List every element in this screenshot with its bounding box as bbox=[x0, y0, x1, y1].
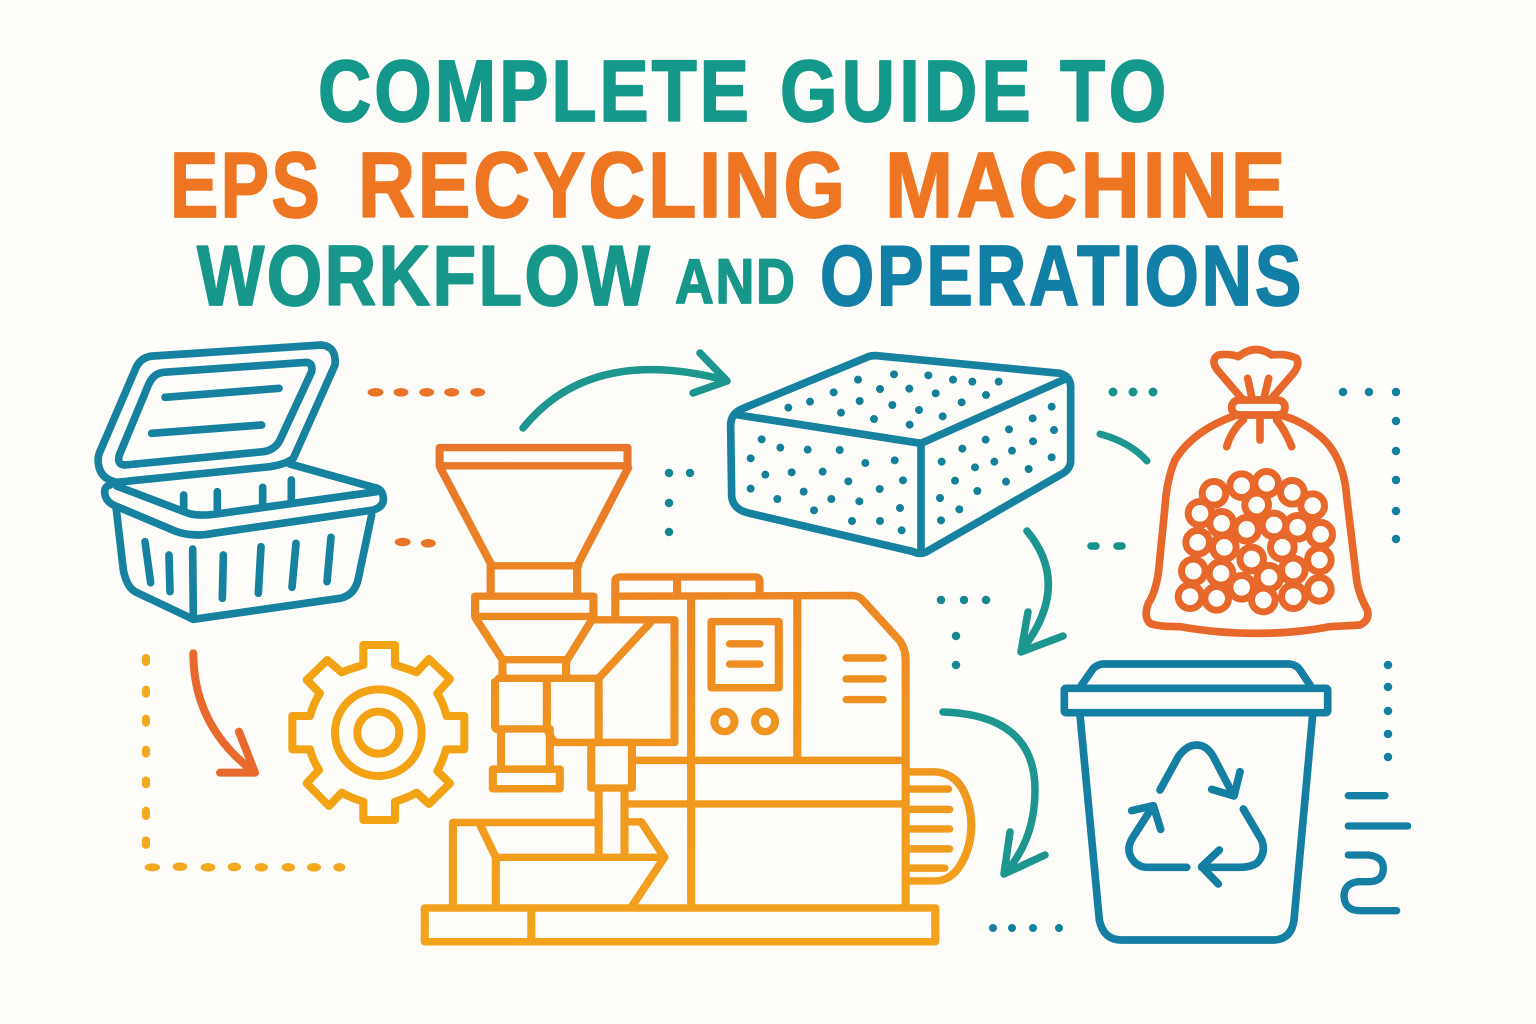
output tray bbox=[453, 822, 664, 907]
teal dots near bag bbox=[1113, 388, 1153, 396]
control knobs bbox=[714, 711, 775, 732]
dashed connector: orange lower bbox=[395, 538, 436, 548]
control cabinet bbox=[615, 577, 906, 908]
blue dots right of bin bbox=[1384, 665, 1392, 757]
title line 1: TO bbox=[1060, 43, 1166, 140]
icon: foam block bbox=[731, 356, 1071, 553]
title line 3 bbox=[197, 228, 1301, 324]
dashed connector: amber left bbox=[142, 654, 345, 872]
motor bbox=[908, 772, 971, 881]
title line 1: COMPLETE bbox=[318, 43, 749, 140]
title line 2: MACHINE bbox=[885, 133, 1285, 237]
teal arrow: foam block to bin bbox=[1021, 531, 1063, 652]
teal dots near hopper bbox=[669, 473, 690, 532]
teal arrow: machine to bin bbox=[943, 712, 1045, 874]
title line 3: WORKFLOW bbox=[197, 228, 650, 323]
title line 1: GUIDE bbox=[780, 43, 1031, 140]
teal dots right of machine bbox=[941, 600, 986, 665]
hopper bbox=[440, 448, 628, 596]
dashed connector: orange top bbox=[368, 388, 485, 397]
recycle symbol bbox=[1129, 745, 1263, 884]
teal dashes near bag bbox=[1091, 542, 1122, 550]
title bbox=[170, 43, 1301, 324]
title line 2: EPS bbox=[170, 133, 320, 237]
title line 2 bbox=[170, 133, 1285, 237]
teal arc connector bbox=[1100, 434, 1147, 461]
control screen bbox=[711, 622, 779, 688]
blue dots below machine bbox=[993, 924, 1059, 932]
extruder block bbox=[493, 620, 674, 856]
icon: recycling machine bbox=[425, 448, 971, 942]
decorative lines and squiggle bbox=[1344, 796, 1408, 911]
title line 1 bbox=[318, 43, 1166, 140]
title line 2: RECYCLING bbox=[358, 134, 845, 237]
icon: bag of pellets bbox=[1146, 350, 1368, 633]
blue dotted connector right of bag bbox=[1343, 392, 1396, 539]
icon: recycling bin bbox=[1064, 664, 1328, 940]
title line 3: OPERATIONS bbox=[820, 230, 1301, 324]
pellets bbox=[1190, 483, 1321, 600]
base plate bbox=[425, 908, 935, 942]
title line 3: AND bbox=[675, 247, 795, 317]
feed throat bbox=[475, 596, 593, 678]
foam dots bbox=[751, 374, 1054, 530]
orange arrow: container to gear bbox=[193, 653, 255, 773]
icon: gear bbox=[292, 645, 464, 820]
icon: food container bbox=[98, 345, 383, 619]
teal arrow: machine to foam block bbox=[523, 353, 727, 428]
vents bbox=[846, 658, 883, 700]
